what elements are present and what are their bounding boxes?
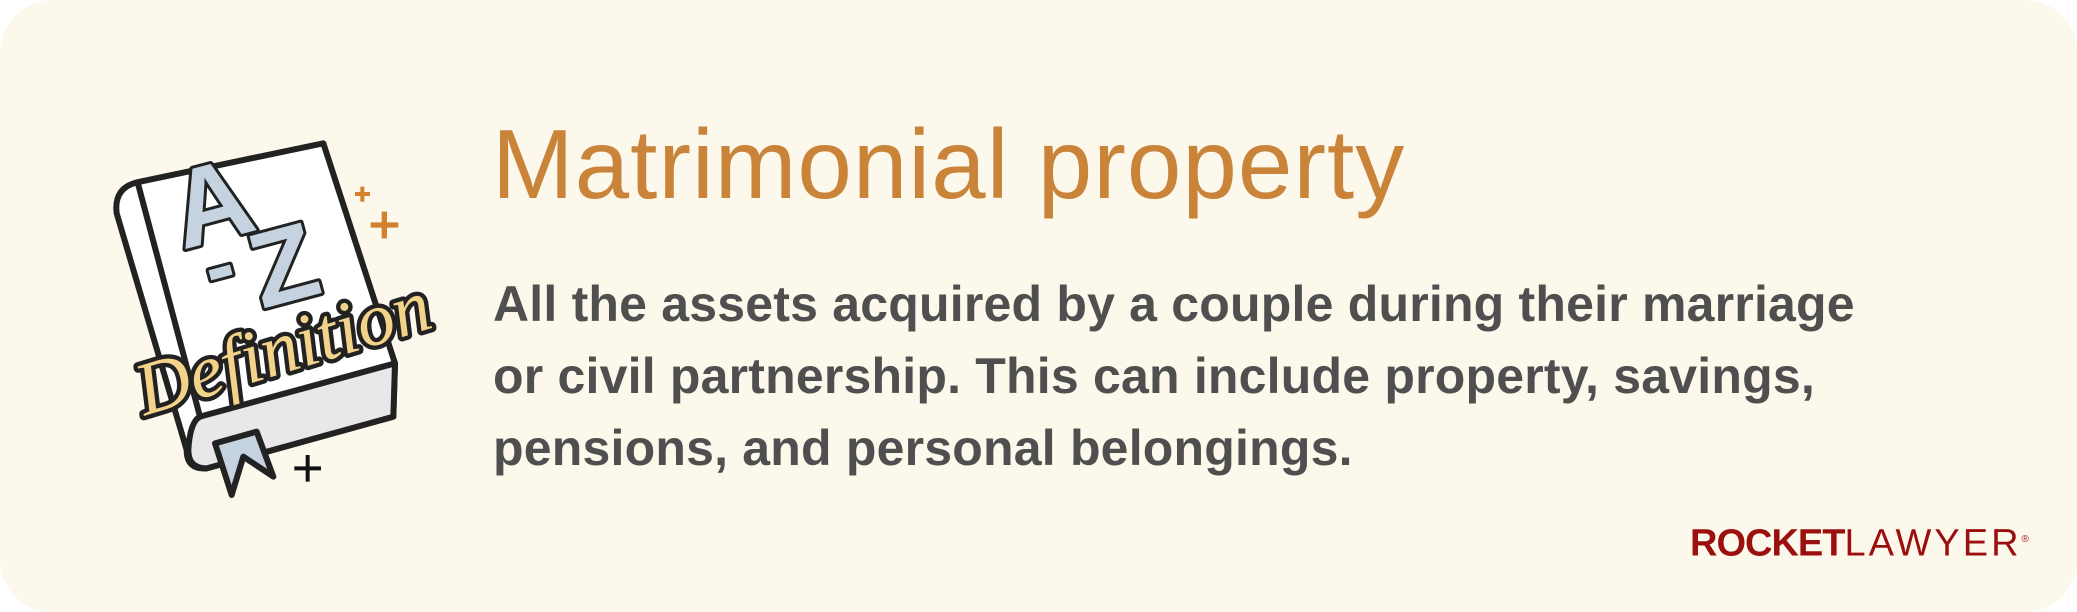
- text block: definition: or civil partnership. This can include property, savings,: [493, 348, 1815, 404]
- icon: A-Z definition book: Definition: [124, 264, 440, 432]
- text block: definition: All the assets acquired by a couple during their marriage: [493, 276, 1855, 332]
- text block: definition: [493, 276, 1855, 476]
- logo: Rocket Lawyer: ROCKETLAWYER®: [1690, 523, 2029, 565]
- icon: A-Z definition book: A: [157, 134, 266, 273]
- text block: definition: pensions, and personal belongings.: [493, 420, 1353, 476]
- icon: A-Z definition book: Z: [237, 198, 331, 331]
- title: Matrimonial property: [492, 109, 1405, 219]
- icon: A-Z definition book: -: [193, 216, 245, 316]
- icon: A-Z definition book: [113, 134, 440, 498]
